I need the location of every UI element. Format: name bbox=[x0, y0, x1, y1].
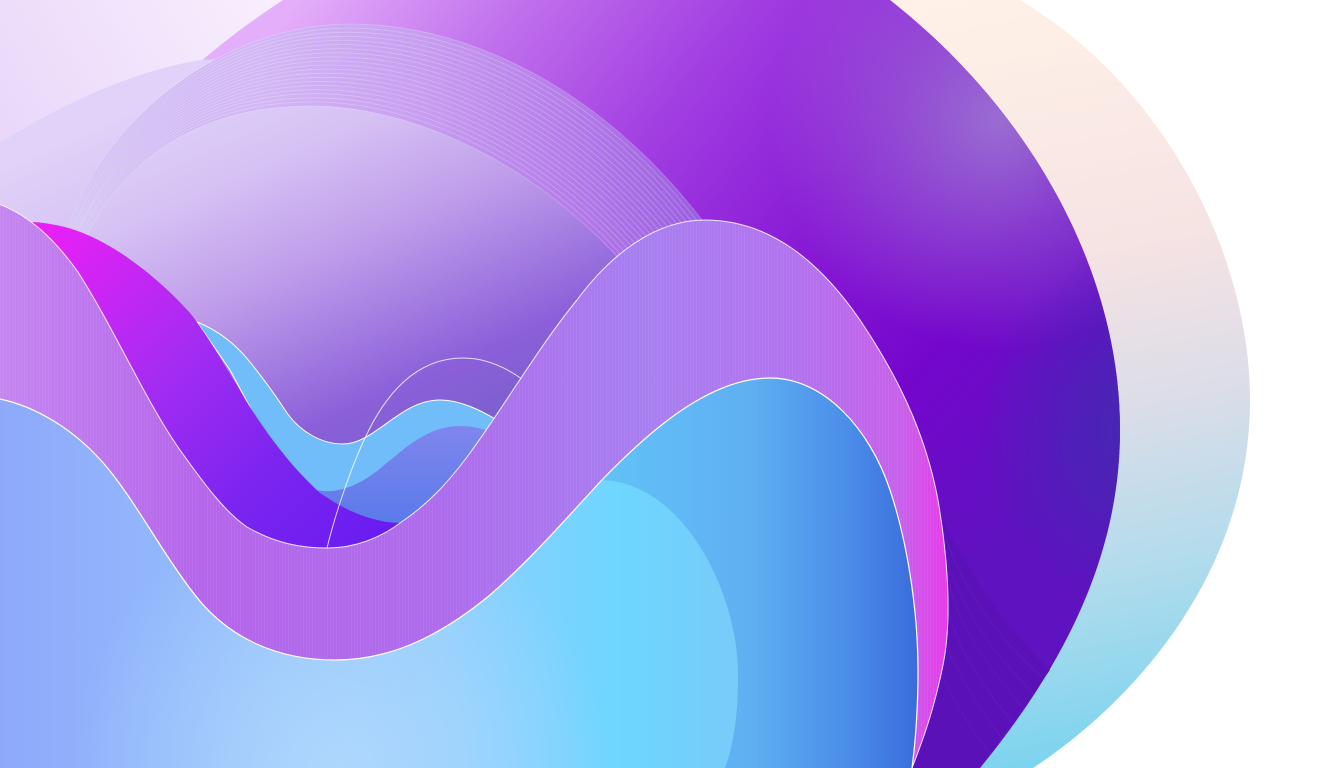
pale peach to cyan outer sphere bbox=[850, 0, 1250, 768]
lavender inner sphere bbox=[0, 55, 660, 768]
fine line arc band bbox=[68, 24, 702, 262]
large violet sphere bbox=[120, 0, 1120, 768]
thin white arc bbox=[327, 358, 522, 548]
magenta to violet wave bbox=[20, 222, 400, 600]
light blue wave bbox=[197, 322, 497, 530]
pale lavender top-left backdrop bbox=[0, 0, 300, 240]
blue foreground hill bbox=[0, 378, 918, 768]
deeper blue wave bbox=[310, 426, 490, 530]
pink violet wave band bbox=[0, 203, 948, 768]
dark line-textured wedge bbox=[905, 500, 1050, 768]
